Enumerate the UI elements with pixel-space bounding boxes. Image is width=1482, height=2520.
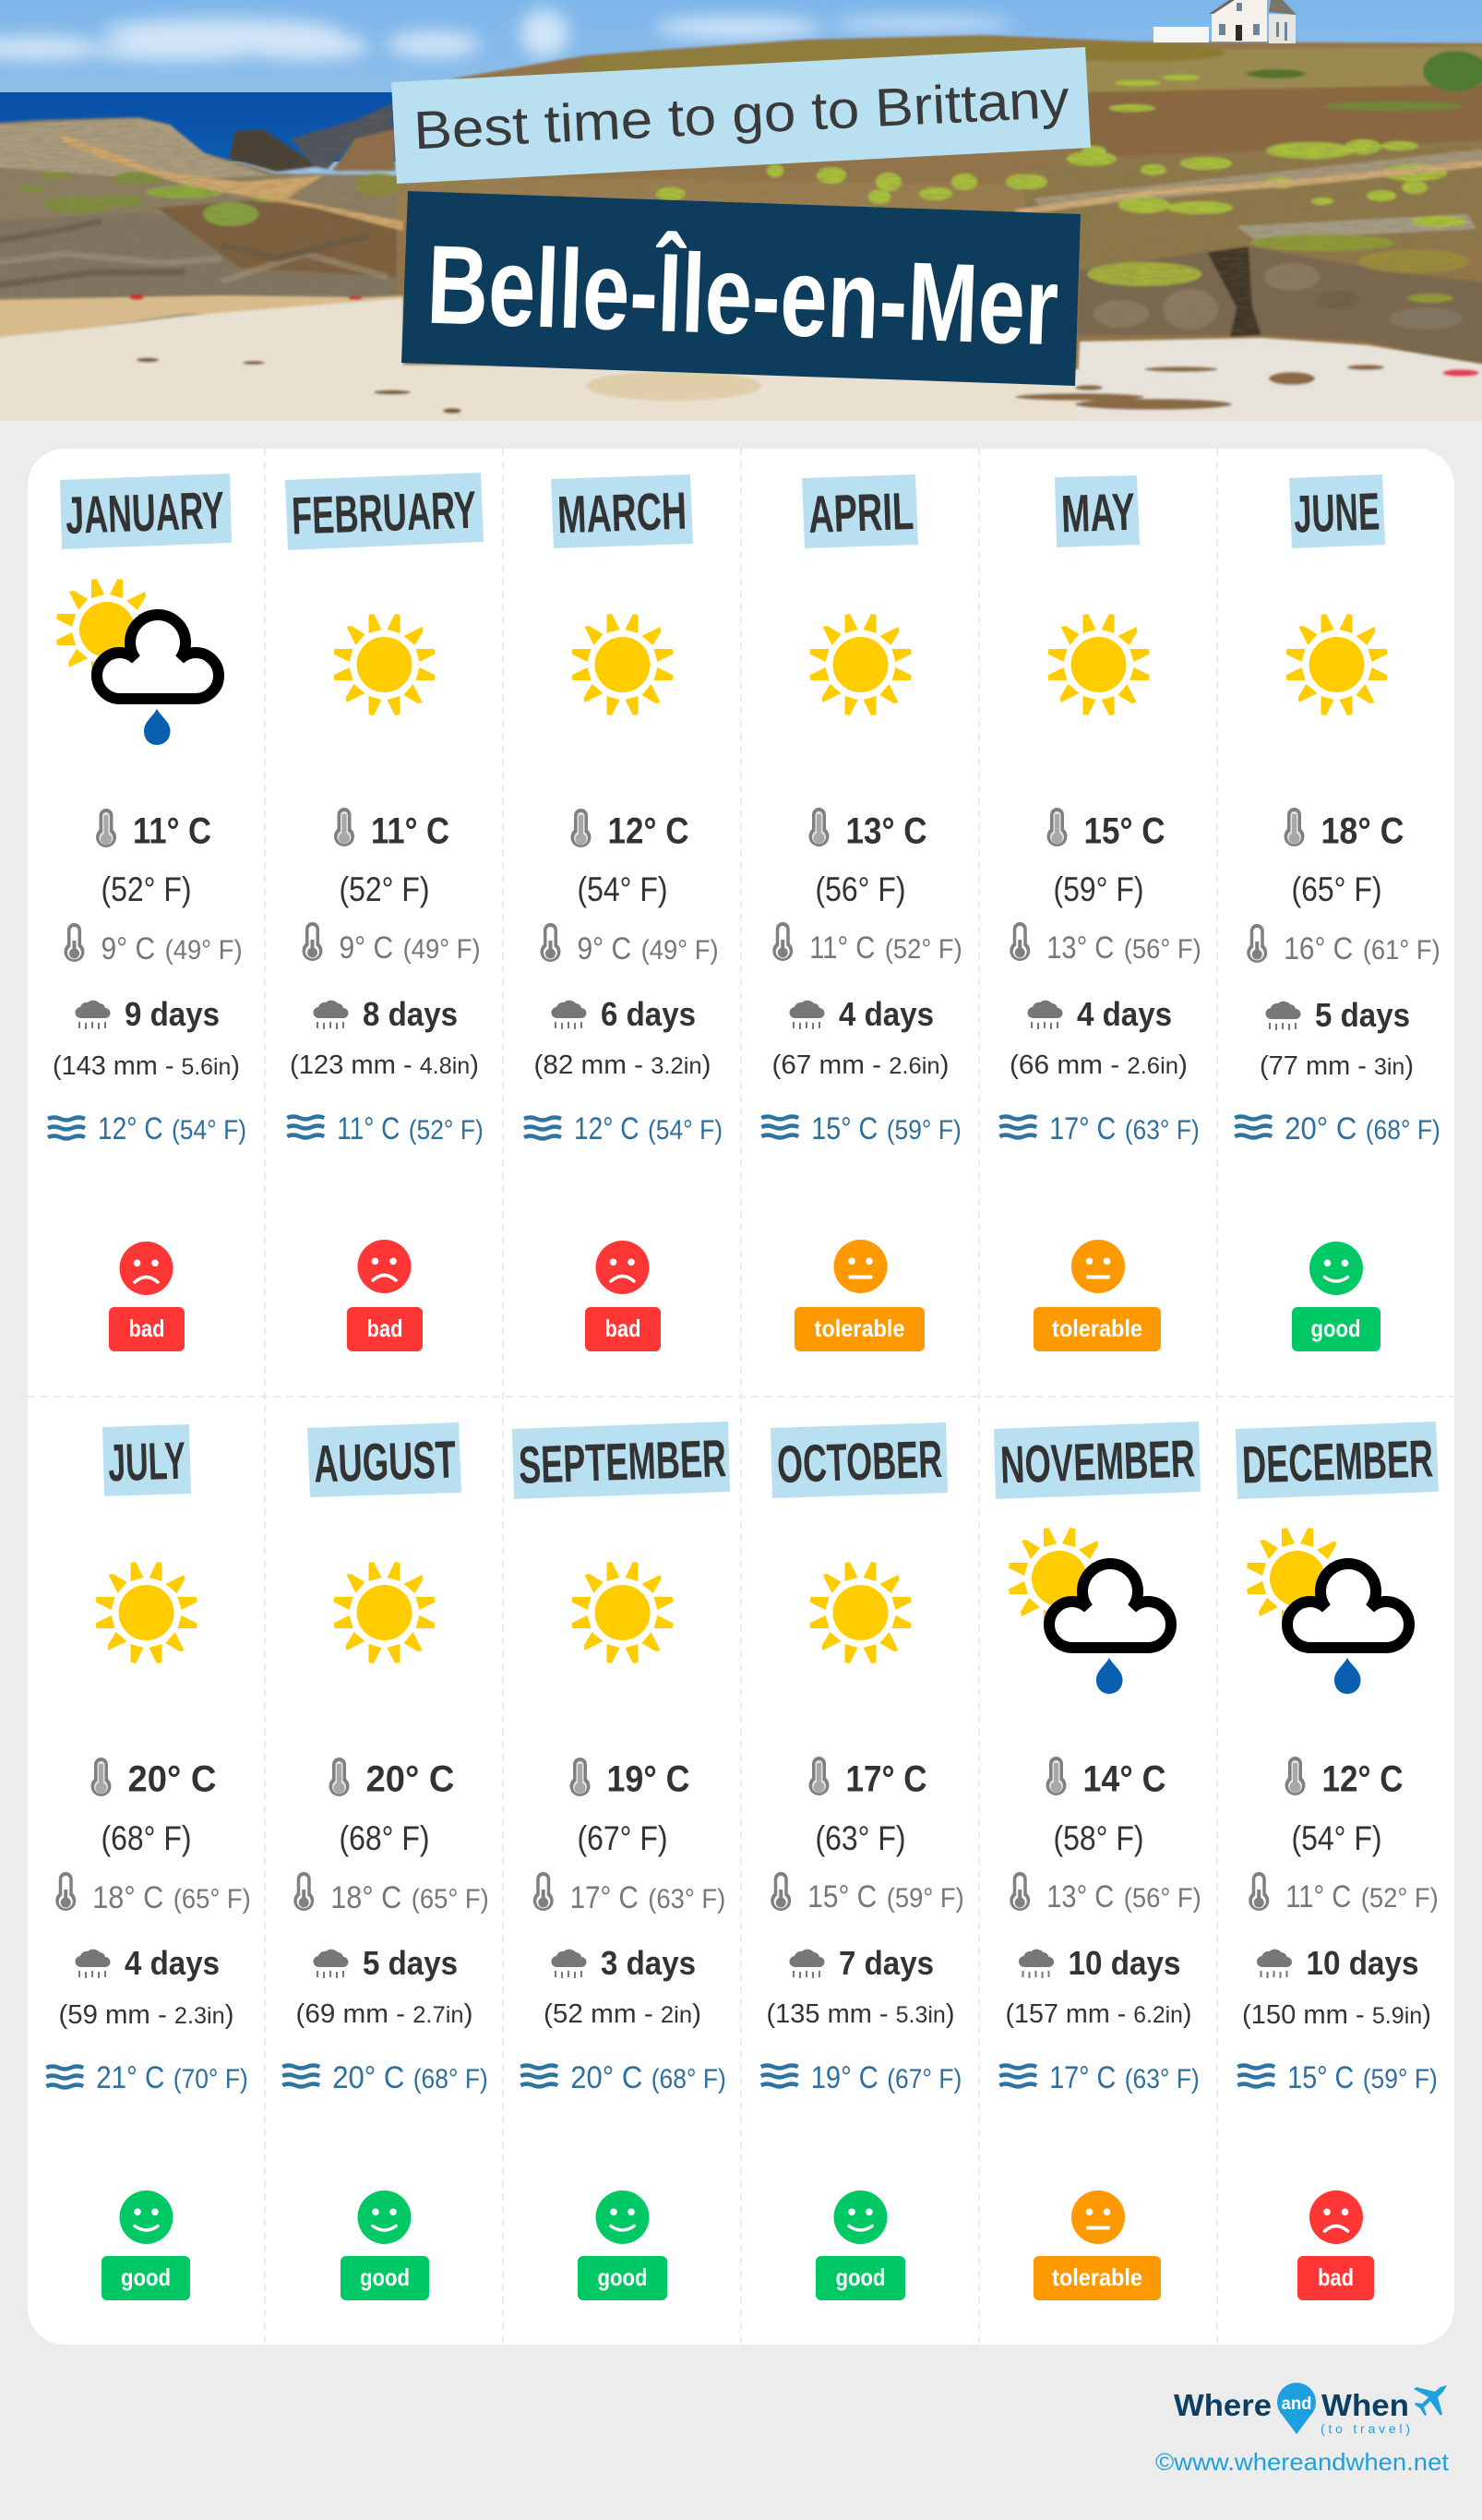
sea temperature: (52° F) xyxy=(409,1115,484,1146)
minimum temperature: 11° C xyxy=(1285,1879,1351,1914)
average temperature: 12° C xyxy=(607,810,688,851)
temperature in Fahrenheit: (54° F) xyxy=(578,870,668,908)
average temperature: 12° C xyxy=(1321,1759,1403,1800)
logo: Where and When: When xyxy=(1321,2388,1409,2422)
icon: sun xyxy=(1286,614,1388,715)
month label: JULY xyxy=(107,1432,186,1493)
icon: sun xyxy=(96,1562,197,1663)
temperature in Fahrenheit: (63° F) xyxy=(816,1819,906,1857)
white card panel xyxy=(28,449,1454,2345)
sea temperature xyxy=(1235,1111,1440,1146)
sea temperature: (63° F) xyxy=(1125,2064,1200,2094)
rating: tolerable: tolerable xyxy=(1052,2263,1142,2291)
sea temperature: 12° C xyxy=(574,1111,639,1146)
panel: August xyxy=(282,1422,489,2300)
minimum temperature xyxy=(1249,1872,1439,1914)
minimum temperature: (65° F) xyxy=(412,1884,489,1914)
minimum temperature: 15° C xyxy=(807,1879,877,1914)
sea temperature: 20° C xyxy=(570,2060,642,2095)
sea temperature: 15° C xyxy=(811,1111,878,1146)
beach xyxy=(0,294,1482,421)
rating: good: good xyxy=(1310,1314,1360,1342)
temperature in Fahrenheit: (59° F) xyxy=(1054,870,1144,908)
rating: bad xyxy=(585,1241,661,1351)
minimum temperature: (56° F) xyxy=(1124,1883,1201,1914)
month label: APRIL xyxy=(807,482,914,545)
minimum temperature: 13° C xyxy=(1046,930,1114,966)
month label: MAY xyxy=(1060,483,1136,544)
sea temperature: (63° F) xyxy=(1125,1115,1200,1146)
sea temperature xyxy=(48,1111,246,1146)
average temperature xyxy=(1285,808,1404,851)
sea temperature xyxy=(46,2060,248,2095)
rain days xyxy=(551,1944,696,1982)
minimum temperature xyxy=(1010,922,1201,966)
icon: sun xyxy=(1048,614,1150,715)
sea temperature xyxy=(520,2060,726,2095)
sea temperature: (59° F) xyxy=(1363,2064,1438,2094)
minimum temperature: (49° F) xyxy=(403,934,481,965)
logo: Where and When: and xyxy=(1281,2394,1312,2414)
average temperature: 11° C xyxy=(371,810,449,851)
sea temperature: 15° C xyxy=(1287,2060,1354,2095)
month label xyxy=(60,474,232,549)
rainfall: (82 mm - 3.2in) xyxy=(533,1050,711,1080)
minimum temperature xyxy=(1247,924,1440,966)
panel: December xyxy=(1236,1422,1439,2300)
title banner xyxy=(401,191,1081,386)
rain days xyxy=(789,1944,934,1982)
month label xyxy=(307,1422,461,1497)
rain days: 7 days xyxy=(839,1944,934,1982)
minimum temperature: 16° C xyxy=(1284,931,1353,966)
temperature in Fahrenheit: (58° F) xyxy=(1054,1819,1144,1857)
temperature in Fahrenheit: (68° F) xyxy=(102,1819,192,1857)
rain days xyxy=(1027,995,1172,1033)
rainfall: (123 mm - 4.8in) xyxy=(290,1050,479,1080)
rating: bad: bad xyxy=(367,1314,402,1342)
rating: good xyxy=(1292,1242,1380,1351)
icon: plane xyxy=(1414,2385,1447,2416)
rating: good xyxy=(341,2190,429,2300)
minimum temperature: (65° F) xyxy=(173,1884,251,1914)
rain days xyxy=(1019,1944,1181,1982)
rating: good: good xyxy=(121,2263,171,2291)
icon: sun, cloud and rain xyxy=(1247,1528,1409,1694)
temperature in Fahrenheit: (54° F) xyxy=(1292,1819,1382,1857)
average temperature: 20° C xyxy=(127,1759,216,1800)
temperature in Fahrenheit: (52° F) xyxy=(340,870,430,908)
rating: bad xyxy=(347,1240,423,1351)
minimum temperature: (52° F) xyxy=(1361,1883,1439,1914)
temperature in Fahrenheit: (68° F) xyxy=(340,1819,430,1857)
sea temperature xyxy=(761,2060,962,2095)
minimum temperature: (59° F) xyxy=(887,1883,964,1914)
rain days: 5 days xyxy=(1315,996,1410,1034)
average temperature: 13° C xyxy=(845,810,926,851)
panel: October xyxy=(761,1422,964,2300)
rain days: 10 days xyxy=(1307,1944,1419,1982)
rating: good xyxy=(102,2190,190,2300)
average temperature xyxy=(1046,808,1165,851)
sea temperature xyxy=(999,2060,1200,2095)
month label: JUNE xyxy=(1293,482,1380,545)
sea temperature: 20° C xyxy=(332,2060,404,2095)
icon: map pin xyxy=(1277,2382,1316,2434)
rating: tolerable xyxy=(1034,2190,1161,2300)
sea temperature: (68° F) xyxy=(1366,1115,1440,1146)
subtitle banner xyxy=(391,47,1091,184)
month label: NOVEMBER xyxy=(999,1429,1196,1495)
average temperature: 20° C xyxy=(365,1759,454,1800)
title banner: Belle-Île-en-Mer xyxy=(425,222,1060,368)
panel: January xyxy=(48,474,246,1351)
rain days: 3 days xyxy=(601,1944,696,1982)
rating: good xyxy=(578,2190,667,2300)
rain days xyxy=(313,995,458,1033)
minimum temperature: 9° C xyxy=(340,930,393,966)
average temperature: 14° C xyxy=(1083,1759,1166,1800)
sea temperature: (54° F) xyxy=(648,1115,723,1146)
minimum temperature xyxy=(541,923,719,966)
rating: tolerable: tolerable xyxy=(814,1314,904,1342)
rain days: 6 days xyxy=(601,995,696,1033)
minimum temperature: 9° C xyxy=(578,931,631,966)
rainfall: (150 mm - 5.9in) xyxy=(1242,2000,1431,2030)
minimum temperature: (61° F) xyxy=(1363,935,1440,966)
icon: sun xyxy=(572,1562,674,1663)
month label xyxy=(551,474,693,548)
icon: sun, cloud and rain xyxy=(1009,1528,1171,1694)
average temperature xyxy=(1046,1757,1166,1800)
minimum temperature xyxy=(1010,1872,1201,1914)
average temperature xyxy=(1285,1757,1403,1800)
minimum temperature: (56° F) xyxy=(1124,934,1201,965)
panel: November xyxy=(994,1422,1201,2300)
minimum temperature: (52° F) xyxy=(885,934,962,965)
rain days: 4 days xyxy=(125,1944,220,1982)
sea temperature: (59° F) xyxy=(887,1115,962,1146)
rainfall: (157 mm - 6.2in) xyxy=(1006,1999,1192,2029)
icon: sun xyxy=(334,1562,436,1663)
rating: tolerable: tolerable xyxy=(1052,1314,1142,1342)
temperature in Fahrenheit: (65° F) xyxy=(1292,870,1382,908)
sea temperature: (67° F) xyxy=(887,2064,962,2094)
average temperature xyxy=(334,808,449,851)
sea temperature xyxy=(1237,2060,1438,2095)
rainfall: (52 mm - 2in) xyxy=(544,1999,701,2029)
subtitle banner: Best time to go to Brittany xyxy=(412,69,1070,161)
sea temperature: 11° C xyxy=(337,1111,400,1146)
rating: good: good xyxy=(360,2263,410,2291)
copyright url: ©www.whereandwhen.net xyxy=(1155,2448,1450,2476)
minimum temperature xyxy=(772,922,962,966)
rain days: 5 days xyxy=(363,1944,458,1982)
rain days: 4 days xyxy=(839,995,934,1033)
average temperature: 17° C xyxy=(845,1759,926,1800)
minimum temperature: 11° C xyxy=(809,930,875,966)
rain days xyxy=(313,1944,458,1982)
sea temperature: 12° C xyxy=(98,1111,162,1146)
hero photo: coastal landscape xyxy=(0,0,1482,443)
minimum temperature: (49° F) xyxy=(641,935,719,966)
rain days xyxy=(551,995,696,1033)
average temperature xyxy=(808,1757,926,1800)
minimum temperature: (63° F) xyxy=(648,1884,725,1914)
rating: bad: bad xyxy=(129,1314,164,1342)
minimum temperature: 9° C xyxy=(102,931,155,966)
month label xyxy=(285,473,484,550)
month label: MARCH xyxy=(556,482,687,545)
rating: bad xyxy=(1297,2190,1374,2300)
sea temperature: (70° F) xyxy=(173,2064,248,2094)
rating: bad: bad xyxy=(1318,2263,1354,2291)
sea temperature: 17° C xyxy=(1049,2060,1116,2095)
month label xyxy=(1055,475,1140,547)
rating: good xyxy=(816,2190,905,2300)
logo: Where and When xyxy=(1174,2382,1447,2436)
panel: September xyxy=(512,1422,730,2300)
minimum temperature: (49° F) xyxy=(165,935,243,966)
rating: good: good xyxy=(836,2263,886,2291)
sea temperature xyxy=(282,2060,488,2095)
sea temperature: 21° C xyxy=(96,2060,164,2095)
minimum temperature: 18° C xyxy=(330,1880,401,1915)
rainfall: (59 mm - 2.3in) xyxy=(59,2000,234,2030)
panel: May xyxy=(999,475,1201,1351)
sea temperature xyxy=(761,1111,962,1146)
minimum temperature xyxy=(293,1872,489,1915)
rain days xyxy=(1265,996,1410,1034)
temperature in Fahrenheit: (52° F) xyxy=(102,870,192,908)
minimum temperature xyxy=(303,922,481,966)
rainfall: (135 mm - 5.3in) xyxy=(766,1999,954,2029)
month label: OCTOBER xyxy=(776,1430,943,1494)
month label: AUGUST xyxy=(313,1430,457,1494)
minimum temperature: 13° C xyxy=(1046,1879,1114,1914)
rating: bad xyxy=(109,1242,185,1351)
icon: sun xyxy=(810,614,912,715)
average temperature xyxy=(96,809,211,851)
icon: sun xyxy=(572,614,674,715)
average temperature: 18° C xyxy=(1321,810,1404,851)
month label: SEPTEMBER xyxy=(518,1429,727,1495)
rainfall: (143 mm - 5.6in) xyxy=(53,1051,240,1081)
average temperature xyxy=(90,1758,216,1800)
sea temperature: 17° C xyxy=(1049,1111,1116,1146)
rainfall: (69 mm - 2.7in) xyxy=(295,1999,472,2029)
average temperature xyxy=(329,1758,454,1800)
rain days: 9 days xyxy=(125,995,220,1033)
sea temperature: (68° F) xyxy=(651,2064,726,2094)
minimum temperature xyxy=(533,1872,725,1915)
panel: March xyxy=(524,474,723,1351)
rain days: 4 days xyxy=(1077,995,1172,1033)
rain days: 10 days xyxy=(1069,1944,1181,1982)
month label: JANUARY xyxy=(65,481,225,546)
panel: February xyxy=(285,473,484,1351)
month label xyxy=(994,1422,1201,1499)
minimum temperature: 17° C xyxy=(570,1880,639,1915)
average temperature: 11° C xyxy=(133,810,211,851)
temperature in Fahrenheit: (67° F) xyxy=(578,1819,668,1857)
rainfall: (77 mm - 3in) xyxy=(1260,1051,1414,1081)
minimum temperature xyxy=(771,1872,964,1914)
logo: Where and When: (to travel) xyxy=(1321,2421,1410,2436)
sea temperature: 19° C xyxy=(811,2060,878,2095)
temperature in Fahrenheit: (56° F) xyxy=(816,870,906,908)
month label xyxy=(771,1422,948,1498)
rating: tolerable xyxy=(795,1240,925,1351)
month label xyxy=(1289,474,1385,548)
rainfall: (67 mm - 2.6in) xyxy=(771,1050,949,1080)
rating: good: good xyxy=(598,2263,648,2291)
rating: tolerable xyxy=(1034,1240,1161,1351)
average temperature: 15° C xyxy=(1083,810,1165,851)
panel: April xyxy=(761,474,962,1351)
panel: July xyxy=(46,1424,251,2300)
rain days xyxy=(789,995,934,1033)
rain days xyxy=(75,1944,220,1982)
sea temperature xyxy=(999,1111,1200,1146)
month label xyxy=(512,1422,730,1499)
month label xyxy=(102,1424,191,1496)
minimum temperature: 18° C xyxy=(92,1880,163,1915)
rain days: 8 days xyxy=(363,995,458,1033)
rating: bad: bad xyxy=(605,1314,640,1342)
rain days xyxy=(75,995,220,1033)
panel: June xyxy=(1235,474,1440,1351)
sea temperature xyxy=(287,1111,484,1146)
icon: sun xyxy=(810,1562,912,1663)
minimum temperature xyxy=(55,1872,251,1915)
rainfall: (66 mm - 2.6in) xyxy=(1010,1050,1188,1080)
icon: sun, cloud and rain xyxy=(56,579,219,745)
average temperature xyxy=(570,809,688,851)
logo: Where and When: Where xyxy=(1174,2388,1272,2422)
month label xyxy=(802,474,918,548)
sea temperature: (68° F) xyxy=(413,2064,488,2094)
average temperature xyxy=(570,1758,690,1800)
month label: FEBRUARY xyxy=(291,481,477,546)
rain days xyxy=(1257,1944,1419,1982)
average temperature xyxy=(808,808,926,851)
minimum temperature xyxy=(65,923,243,966)
average temperature: 19° C xyxy=(607,1759,690,1800)
icon: sun xyxy=(334,614,436,715)
sea temperature: (54° F) xyxy=(172,1115,246,1146)
sea temperature xyxy=(524,1111,723,1146)
sea temperature: 20° C xyxy=(1285,1111,1357,1146)
